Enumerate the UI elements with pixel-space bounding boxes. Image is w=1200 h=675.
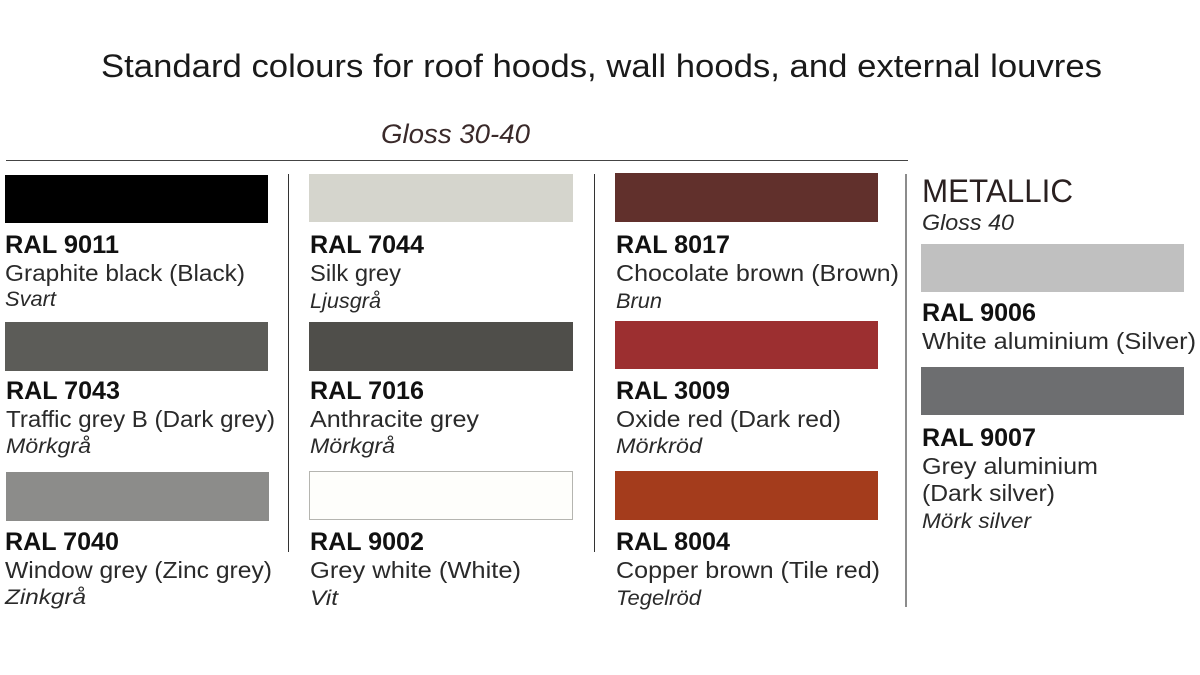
heading: metallic: METALLIC <box>922 173 1073 209</box>
swatch group: RAL 3009 <box>615 321 878 458</box>
swatch group: RAL 7044: RAL 7044 <box>310 231 424 259</box>
swatch group: RAL 3009: Mörkröd <box>616 435 703 458</box>
swatch group: RAL 7040: RAL 7040 <box>5 528 119 556</box>
swatch group: RAL 8017 <box>615 173 899 313</box>
swatch group: RAL 7016: RAL 7016 <box>310 377 424 405</box>
swatch group: RAL 7044: Silk grey <box>310 260 401 286</box>
swatch group: RAL 9006: RAL 9006 <box>922 299 1036 327</box>
swatch group: RAL 7044: Ljusgrå <box>310 290 381 313</box>
swatch group: RAL 7044 <box>309 174 573 313</box>
swatch group: RAL 9007: Grey aluminium <box>922 453 1098 479</box>
swatch group: RAL 8017: Chocolate brown (Brown) <box>616 260 899 286</box>
swatch group: RAL 8017: Brun <box>616 290 662 313</box>
heading: metallic <box>922 173 1073 235</box>
swatch group: RAL 7040: Zinkgrå <box>4 586 86 609</box>
swatch group: RAL 9011: RAL 9011 <box>5 231 119 259</box>
swatch group: RAL 7040: Window grey (Zinc grey) <box>5 557 272 583</box>
swatch group: RAL 9002: RAL 9002 <box>310 528 424 556</box>
heading: metallic: Gloss 40 <box>922 210 1014 235</box>
swatch group: RAL 9011: Graphite black (Black) <box>5 260 245 286</box>
swatch group: RAL 8004: Tegelröd <box>616 587 702 610</box>
swatch group: RAL 8004: Copper brown (Tile red) <box>616 557 880 583</box>
swatch group: RAL 7016 <box>309 322 573 458</box>
swatch group: RAL 7043: RAL 7043 <box>6 377 120 405</box>
swatch group: RAL 9007: Mörk silver <box>922 510 1032 533</box>
swatch group: RAL 9007: RAL 9007 <box>922 424 1036 452</box>
swatch group: RAL 8004: RAL 8004 <box>616 528 730 556</box>
swatch group: RAL 9007: (Dark silver) <box>922 480 1055 506</box>
swatch group: RAL 7043 <box>5 322 275 458</box>
swatch group: RAL 9011 <box>5 175 268 311</box>
swatch group: RAL 7016: Mörkgrå <box>310 435 395 458</box>
swatch group: RAL 7043: Traffic grey B (Dark grey) <box>6 406 275 432</box>
swatch group: RAL 3009: Oxide red (Dark red) <box>616 406 841 432</box>
swatch group: RAL 8017: RAL 8017 <box>616 231 730 259</box>
swatch group: RAL 9007 <box>921 367 1184 533</box>
swatch group: RAL 9006: White aluminium (Silver) <box>922 328 1196 354</box>
swatch group: RAL 9002: Grey white (White) <box>310 557 521 583</box>
title: Standard colours for roof hoods, wall hoods, and external louvres <box>101 48 1102 84</box>
heading: gloss 30-40: Gloss 30-40 <box>381 119 530 149</box>
swatch group: RAL 9002: Vit <box>310 587 339 610</box>
swatch group: RAL 9011: Svart <box>5 288 57 311</box>
swatch group: RAL 3009: RAL 3009 <box>616 377 730 405</box>
swatch group: RAL 9006 <box>921 244 1196 354</box>
swatch group: RAL 7043: Mörkgrå <box>6 435 91 458</box>
swatch group: RAL 7040 <box>4 472 272 609</box>
swatch group: RAL 7016: Anthracite grey <box>310 406 479 432</box>
swatch group: RAL 8004 <box>615 471 880 610</box>
swatch group: RAL 9002 <box>310 472 572 610</box>
